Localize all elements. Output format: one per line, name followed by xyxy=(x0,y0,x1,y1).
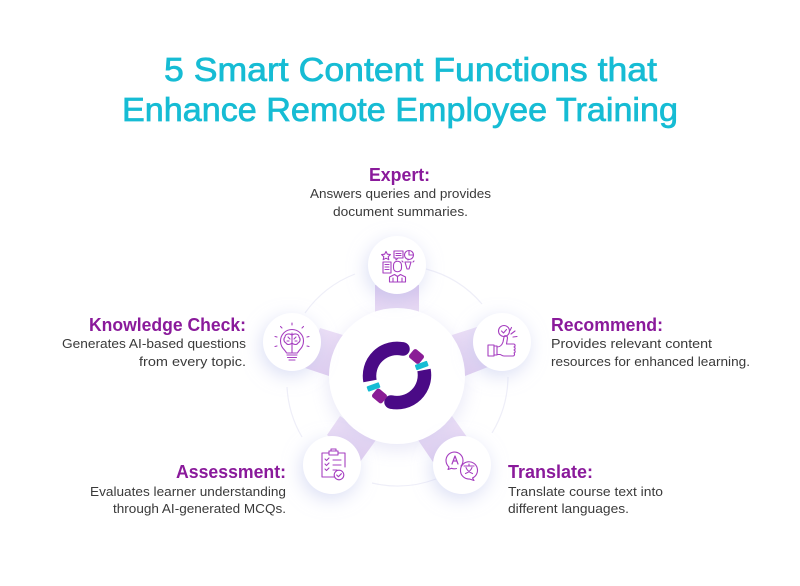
text: knowledge check xyxy=(62,315,247,369)
text: assessment xyxy=(90,462,286,516)
logo xyxy=(366,342,429,409)
title: Enhance Remote Employee Training xyxy=(122,91,678,128)
icon: translation speech bubbles xyxy=(446,452,477,480)
icon: expert person with ideas xyxy=(382,250,414,282)
node: translate xyxy=(433,436,491,494)
text: knowledge check: Knowledge Check: xyxy=(89,315,246,335)
center circle with logo xyxy=(329,308,465,444)
icon: checklist clipboard xyxy=(322,449,345,480)
node: knowledge check xyxy=(263,313,321,371)
text: assessment: Evaluates learner understanding xyxy=(90,484,286,499)
text: translate: Translate: xyxy=(508,462,593,482)
title: 5 Smart Content Functions that xyxy=(164,51,657,88)
text: assessment: through AI-generated MCQs. xyxy=(113,501,286,516)
text: recommend xyxy=(551,315,750,369)
text: expert: Expert: xyxy=(369,165,430,185)
node: assessment xyxy=(303,436,361,494)
icon: thumbs up with check xyxy=(488,326,517,356)
connector wedges xyxy=(305,285,488,462)
node: recommend xyxy=(473,313,531,371)
text: assessment: Assessment: xyxy=(176,462,286,482)
text: recommend: Recommend: xyxy=(551,315,663,335)
text: recommend: Provides relevant content xyxy=(551,336,712,351)
text: expert xyxy=(310,165,492,219)
title xyxy=(122,51,678,128)
outer ring xyxy=(287,269,508,486)
text: knowledge check: from every topic. xyxy=(139,354,246,369)
text: expert: document summaries. xyxy=(333,204,468,219)
text: translate xyxy=(508,462,663,516)
text: translate: different languages. xyxy=(508,501,629,516)
icon: brain light bulb xyxy=(275,323,309,360)
text: knowledge check: Generates AI-based questions xyxy=(62,336,247,351)
central wheel diagram xyxy=(263,236,531,494)
text: expert: Answers queries and provides xyxy=(310,186,492,201)
text: translate: Translate course text into xyxy=(508,484,663,499)
node: expert xyxy=(368,236,426,294)
text: recommend: resources for enhanced learning. xyxy=(551,354,750,369)
